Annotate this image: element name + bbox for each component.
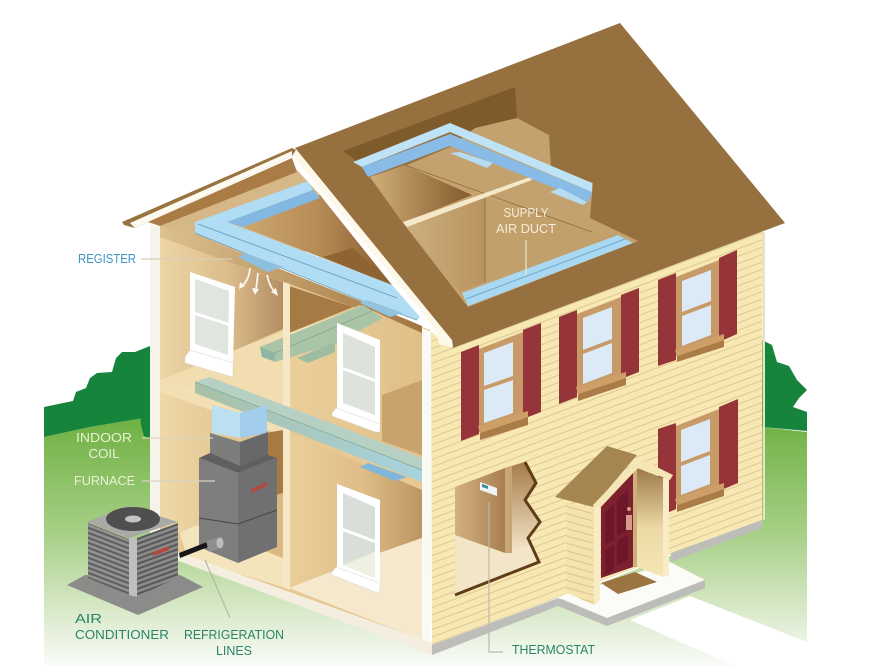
top <box>87 506 178 538</box>
label: refrigeration lines <box>184 560 284 658</box>
lower left wall <box>160 392 283 560</box>
inner wall <box>637 468 663 577</box>
door handle <box>626 507 632 530</box>
label: air conditioner: AIR <box>75 612 102 626</box>
label: register: REGISTER <box>78 252 136 266</box>
register: upper duct <box>238 253 283 272</box>
upper duct registers <box>450 152 493 168</box>
front duct <box>462 235 633 306</box>
label: refrigeration lines: REFRIGERATION <box>184 628 284 642</box>
fan <box>106 507 160 531</box>
furnace badge <box>251 482 267 493</box>
cream floor edge <box>290 309 356 334</box>
corner <box>129 538 137 597</box>
label: furnace: FURNACE <box>74 474 135 488</box>
duct: attic supply left <box>195 181 420 320</box>
left side wall <box>567 503 594 605</box>
upper right wedge <box>289 286 353 333</box>
base cut edge <box>176 552 432 655</box>
cream beam <box>403 177 532 227</box>
gable attic void <box>243 195 392 285</box>
porch <box>555 446 673 605</box>
interior base <box>150 225 430 652</box>
label: indoor coil: COIL <box>88 447 120 461</box>
window: front upper 1 <box>461 323 541 441</box>
label: refrigeration lines: LINES <box>216 644 252 658</box>
attic through roof opening <box>343 87 638 307</box>
label: indoor coil <box>76 431 213 461</box>
upper right room wall <box>289 305 422 457</box>
window: upper left room <box>185 272 235 377</box>
dark underside <box>343 87 551 168</box>
left face <box>88 523 129 595</box>
duct: upper floor branch <box>260 305 383 363</box>
plenum duct <box>212 405 267 438</box>
gable trim <box>292 149 453 347</box>
window: front upper 3 <box>658 250 737 366</box>
label: indoor coil: INDOOR <box>76 431 132 445</box>
refrigeration lines <box>179 537 224 558</box>
left corner post <box>150 225 160 541</box>
door frame <box>633 468 637 567</box>
upper left room floor <box>160 331 283 425</box>
upper right room shade <box>382 380 422 455</box>
gable trim <box>593 458 673 509</box>
lower left floor <box>180 525 283 587</box>
register: lower room <box>360 463 407 481</box>
arrows: supply air <box>239 268 278 296</box>
upper left room wall <box>160 237 283 380</box>
duct: second floor trunk <box>195 377 422 482</box>
dark wall <box>370 165 472 223</box>
trees: right hedge <box>762 340 807 431</box>
walkway <box>630 596 807 666</box>
label: supply air duct <box>496 206 556 275</box>
left eave <box>122 148 297 228</box>
door <box>601 473 633 578</box>
label: thermostat: THERMOSTAT <box>512 643 595 657</box>
lower right wall <box>485 197 618 282</box>
attic ceiling <box>160 170 322 270</box>
window: upper right room <box>332 323 380 432</box>
void shadow <box>323 248 392 285</box>
label: air conditioner: CONDITIONER <box>75 628 169 642</box>
lower left wall <box>403 197 485 292</box>
partition post <box>283 282 290 590</box>
upper duct face <box>362 134 592 202</box>
back slope <box>370 118 638 307</box>
front facade <box>431 232 765 655</box>
furnace <box>199 453 277 563</box>
right face <box>137 523 178 597</box>
floor slab left <box>160 380 283 436</box>
air conditioner <box>67 506 203 615</box>
badge <box>153 546 169 556</box>
register: right duct <box>360 300 403 317</box>
foundation <box>432 598 558 655</box>
rafter lines <box>405 165 592 282</box>
house cutaway interior <box>150 170 432 655</box>
label: supply air duct: AIR DUCT <box>496 222 556 236</box>
behind furnace shadow <box>266 430 283 498</box>
posts <box>594 505 600 605</box>
window: front upper 2 <box>559 288 639 404</box>
porch step <box>558 562 705 626</box>
window: lower right room <box>332 484 380 592</box>
main roof with cutaway <box>295 23 785 348</box>
trees: left hedge <box>44 346 152 440</box>
lower right wall <box>289 433 422 588</box>
right corner post <box>422 328 431 644</box>
label: thermostat <box>489 502 595 657</box>
indoor coil <box>210 432 268 467</box>
thermostat cutaway <box>455 462 540 595</box>
ground: lawn <box>44 417 807 666</box>
window: front lower right <box>658 399 738 517</box>
ceiling band <box>160 226 422 335</box>
upper duct top <box>353 123 592 192</box>
label: air conditioner <box>75 612 169 642</box>
thermostat <box>480 482 497 496</box>
lower right floor <box>289 538 422 640</box>
label: supply air duct: SUPPLY <box>504 206 549 220</box>
pad <box>67 575 203 615</box>
porch roof <box>555 446 637 507</box>
